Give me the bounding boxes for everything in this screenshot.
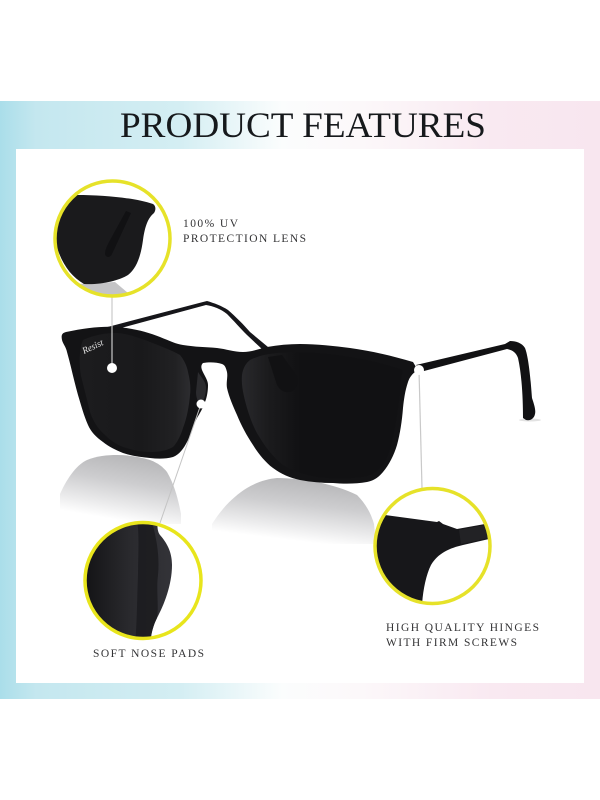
label: hinges and screws: HIGH QUALITY HINGES [386, 622, 539, 634]
leader line: nose pads [160, 404, 201, 523]
label: UV protection [183, 218, 306, 245]
left lens [80, 333, 190, 452]
label: hinges and screws: WITH FIRM SCREWS [386, 637, 517, 649]
brand logo: Resist [80, 338, 106, 357]
title: PRODUCT FEATURES [120, 105, 486, 145]
nose pad [196, 372, 206, 406]
sunglasses [62, 301, 541, 484]
far arm seen through right lens [268, 355, 298, 392]
label: UV protection: PROTECTION LENS [183, 233, 306, 245]
right lens [242, 352, 403, 478]
leader line: UV lens [111, 296, 113, 368]
callout circle: nose pad detail [80, 515, 201, 645]
frame [62, 327, 416, 484]
marker dot: UV lens [107, 363, 117, 373]
callout circle: lens detail [50, 181, 170, 300]
callout circle: hinge detail [370, 488, 490, 610]
marker dot: nose pads [196, 400, 206, 408]
near temple arm [416, 341, 535, 420]
lens reflections on the surface [60, 455, 376, 544]
shadow under near temple tip [519, 418, 541, 422]
gradient background band [0, 101, 600, 699]
white content panel [16, 149, 584, 683]
leader line: hinges [419, 370, 422, 488]
marker dot: hinges [414, 365, 424, 375]
label: UV protection: 100% UV [183, 218, 239, 230]
label: soft nose pads: SOFT NOSE PADS [93, 648, 204, 660]
label: hinges and screws [386, 622, 539, 649]
far temple arm [100, 301, 268, 350]
